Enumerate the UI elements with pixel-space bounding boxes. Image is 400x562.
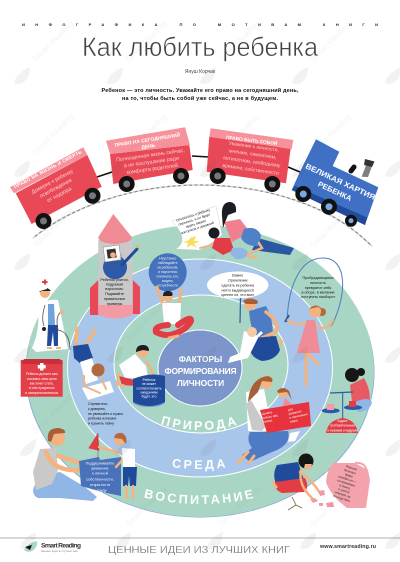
boy with broken jug: в опыте, [339, 483, 351, 491]
rocket: подражая [106, 282, 123, 286]
footer line [0, 537, 400, 539]
author: Януш Корчак [185, 69, 216, 75]
boy with broken jug: право [344, 472, 354, 479]
lead text [102, 87, 299, 102]
watermark: Smart Reading [124, 484, 168, 528]
father and son: к личной [92, 470, 108, 476]
boy with broken jug: получает [343, 468, 357, 476]
reading woman [238, 376, 311, 463]
mother with baby under umbrella: нечто выдающееся [222, 288, 254, 292]
center label [164, 354, 236, 388]
wagon 3: Уважение к личности, [228, 141, 279, 154]
watermark: Smart Reading [124, 19, 168, 63]
boy with broken jug: последствия [332, 494, 351, 503]
boy with broken jug: он проживает [337, 478, 357, 488]
jumping rope girl: поступать наоборот [301, 295, 335, 299]
reading woman: и понимания [289, 412, 308, 420]
jumping rope girl [285, 258, 343, 385]
reading woman: Цените [261, 410, 273, 416]
footer logo: Ценные идеи из лучших книг [41, 550, 78, 553]
watermark: Smart Reading [309, 112, 353, 156]
wagon 3 [207, 128, 293, 192]
watermark: Smart Reading [217, 19, 261, 63]
balance scale girl: Будьте [338, 419, 348, 423]
first aid tip: и самореализоваться [25, 391, 58, 395]
doctor [32, 280, 70, 352]
locomotive: РЕБЕНКА [316, 180, 354, 203]
blue balloon tip: потребности [157, 284, 178, 288]
mother with baby under umbrella: стремление [228, 278, 248, 282]
father and son: и труду [93, 488, 107, 492]
footer url: www.smartreading.ru [319, 544, 376, 550]
father and son: открытости [90, 482, 110, 487]
kneeling kid with book: Ребенок [143, 378, 156, 382]
balance scale girl: требовательным [330, 424, 355, 428]
first aid tip: в чем нуждаться [29, 386, 55, 390]
watermark: Smart Reading [31, 391, 75, 435]
concentric rings [26, 225, 374, 518]
lead text: Ребенок — это личность. Уважайте его право на сегодняшний день, [102, 87, 299, 94]
left tip text: и хранить тайну [88, 422, 114, 426]
kneeling kid with book: ожиданиям [140, 390, 158, 394]
jumping rope girl: личность [310, 281, 326, 285]
boy with broken jug: и учится [338, 487, 350, 494]
boy with broken jug: Ребенок [345, 464, 358, 472]
lying child drawing [73, 328, 114, 400]
railway track [33, 185, 372, 246]
header label: ИНФОГРАФИКА ПО МОТИВАМ КНИГИ [22, 22, 378, 27]
blue balloon tip [149, 253, 187, 291]
woman and child drawing: ждать ваших [185, 219, 207, 229]
wagon 3: ПРАВО БЫТЬ СОБОЙ [226, 133, 278, 147]
blue balloon tip: за ребенком, [157, 266, 178, 270]
ring labels: ВОСПИТАНИЕ [144, 489, 254, 504]
center label: ФОРМИРОВАНИЯ [164, 366, 236, 376]
footer logo [24, 541, 81, 553]
lead text: на то, чтобы быть собой уже сейчас, а не в будущем. [122, 95, 278, 102]
jumping rope girl: превратит себя [305, 286, 331, 290]
title: Как любить ребенка [82, 32, 319, 62]
first aid tip: осознать свои цели [27, 377, 57, 381]
watermark: Smart Reading [217, 484, 261, 528]
wagon 2: комфорта родителей [126, 162, 179, 176]
reading woman: сказка [263, 418, 273, 424]
woman and child drawing: Относитесь к ребенку [176, 208, 211, 223]
balance scale girl [322, 368, 372, 433]
left tip text: к доверию, [88, 407, 106, 411]
woman and child drawing: поступков и указаний [180, 221, 215, 235]
boy with broken jug: ошибаться — [338, 474, 357, 484]
reading woman: только миг, [262, 413, 279, 420]
reading woman: для [287, 407, 294, 412]
mother with baby under umbrella: сделать из ребенка [221, 284, 254, 288]
meditating figure [156, 287, 191, 338]
watermark: Smart Reading [124, 112, 168, 156]
blue balloon tip: и научитесь [158, 270, 178, 274]
woman and child drawing [172, 202, 294, 259]
watermark: Smart Reading [31, 19, 75, 63]
first aid tip: Ребенок должен сам [26, 372, 58, 376]
rocket [90, 214, 140, 318]
jumping rope girl: Пробуждающаяся [302, 276, 334, 280]
watermark: Smart Reading [309, 484, 353, 528]
ring labels [144, 416, 254, 504]
left tip text: не увлекайте и нужно [88, 412, 123, 416]
watermark: Smart Reading [309, 205, 353, 249]
father and son [33, 428, 137, 501]
ring labels: СРЕДА [172, 459, 226, 472]
father and son: собственности, [86, 476, 114, 482]
watermark: Smart Reading [31, 112, 75, 156]
boy with broken jug [272, 454, 370, 510]
couplings [97, 156, 300, 177]
watermark: Smart Reading [309, 19, 353, 63]
footer slogan: ЦЕННЫЕ ИДЕИ ИЗ ЛУЧШИХ КНИГ [108, 544, 290, 556]
wagon 2: Полноценная жизнь сейчас, [116, 147, 185, 163]
rocket: Подавайте [105, 292, 124, 296]
father and son: уважение [91, 466, 109, 470]
wagon 3: мнению, симпатиям, [229, 148, 277, 161]
left tip text [88, 402, 123, 426]
wagon 1: Доверие к ребенку [31, 168, 75, 196]
reading woman: мира [290, 418, 298, 424]
wagon 2 [106, 127, 193, 192]
wagon 3: антипатиям, свободному [223, 155, 281, 169]
rocket: Ребенок учится, [100, 278, 129, 282]
blue balloon tip: видеть [162, 279, 173, 283]
kneeling kid with book: соответствовать [136, 386, 162, 390]
wagon 1: от надзора [46, 186, 73, 204]
footer logo: Smart Reading [41, 542, 81, 550]
mother with baby under umbrella: ценнее их, что всех [221, 293, 254, 297]
rocket: примеры [107, 302, 123, 306]
locomotive [292, 139, 378, 227]
kneeling kid with book [117, 345, 165, 407]
ring labels: ПРИРОДА [161, 416, 236, 432]
watermark: Smart Reading [124, 298, 168, 342]
father and son: Поддерживайте [86, 460, 114, 466]
center label: ЛИЧНОСТИ [177, 378, 224, 388]
rocket: правильные [104, 297, 125, 301]
wagon 1 [10, 147, 102, 229]
center label: ФАКТОРЫ [179, 354, 222, 364]
blue balloon tip: Неустанно [159, 256, 176, 260]
left tip text: ребенка излишне [88, 416, 116, 420]
wagon 1: освобождение [39, 178, 73, 200]
rocket: взрослым. [105, 287, 124, 291]
locomotive: ВЕЛИКАЯ ХАРТИЯ [304, 162, 377, 202]
kneeling kid with book: будет, это [142, 394, 157, 398]
wagon 1: ПРАВО НА ЖИЗНЬ И СМЕРТЬ [13, 149, 84, 190]
left tip text: Стремитесь [88, 402, 108, 406]
wagon 3: времени, собственности [222, 163, 279, 177]
wagon 2: ДЕНЬ [141, 143, 156, 151]
blue balloon tip: наблюдайте [158, 261, 178, 265]
watermark: Smart Reading [217, 112, 261, 156]
jumping rope girl: в опоре, в желании [302, 290, 334, 294]
mother with baby under umbrella: Важно [232, 274, 243, 278]
first aid tip [21, 359, 63, 397]
woman and child drawing: серьезно, и он будет [178, 212, 211, 227]
watermark: Smart Reading [31, 205, 75, 249]
mother with baby under umbrella [207, 272, 283, 363]
wagon 2: ПРАВО НА СЕГОДНЯШНИЙ [114, 130, 181, 149]
first aid tip: как хочет стать, [30, 382, 54, 386]
reading woman: развития [288, 409, 302, 416]
kneeling kid with book: не может [142, 382, 157, 386]
boy with broken jug: отвечать за [334, 490, 351, 499]
blue balloon tip: понимать его, [156, 274, 179, 278]
balance scale girl: и нежным и мудрым [328, 428, 357, 432]
wagon 2: а не послушание ради [124, 156, 179, 169]
